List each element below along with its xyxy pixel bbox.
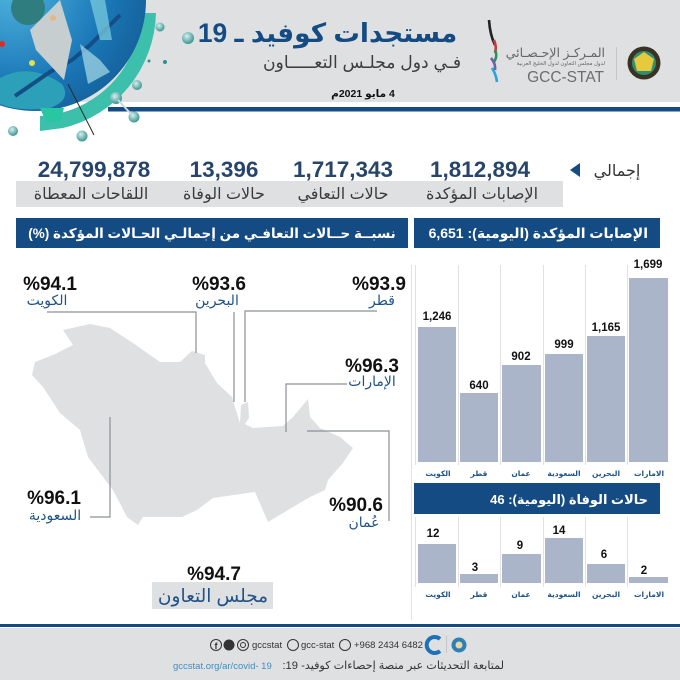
stat: confirmed: 1,812,894 — [430, 157, 531, 182]
bar chart: daily deaths — [415, 517, 668, 599]
stat: deaths: 13,396 — [190, 157, 258, 182]
stat: deaths — [183, 157, 265, 204]
icons: footer logos — [427, 636, 466, 653]
bar chart: daily confirmed: 640 — [469, 380, 489, 392]
callout: Qatar: %93.9 — [352, 274, 406, 295]
icons: social media — [210, 640, 350, 651]
callout: Oman: %90.6 — [329, 495, 383, 516]
stat: recovered — [293, 157, 393, 204]
icon: header illustration with vaccine needle — [0, 0, 194, 142]
stat: deaths: حالات الوفاة — [183, 186, 265, 204]
bar chart: daily confirmed: 1,246 — [423, 311, 451, 323]
bar chart: daily confirmed: الامارات — [634, 469, 664, 478]
bar chart: daily deaths: 6 — [601, 549, 607, 561]
bar chart: daily confirmed: 1,699 — [634, 259, 662, 271]
bar chart: daily confirmed: 999 — [554, 339, 574, 351]
callout: Kuwait: %94.1 — [23, 274, 77, 295]
bar chart: daily deaths: عمان — [511, 590, 531, 599]
footer background — [0, 624, 680, 680]
footer link — [173, 660, 504, 673]
bar chart: daily confirmed: 902 — [511, 351, 531, 363]
bar chart: daily deaths: السعودية — [547, 590, 581, 599]
callout: UAE — [286, 356, 399, 432]
bar chart: daily deaths: 9 — [517, 540, 523, 552]
callout: UAE: %96.3 — [345, 356, 399, 377]
bar chart: daily deaths: الامارات — [634, 590, 664, 599]
bar chart: daily confirmed: 1,165 — [592, 322, 621, 334]
bar chart: daily confirmed: السعودية — [547, 469, 581, 478]
callout: Kuwait — [23, 274, 196, 353]
bar chart: daily confirmed: قطر — [470, 469, 488, 478]
callout: Qatar: قطر — [368, 292, 395, 309]
bar chart: daily deaths: 2 — [641, 565, 647, 577]
bar chart: daily confirmed: الكويت — [425, 469, 451, 478]
contact line — [252, 640, 423, 651]
contact line: +968 2434 6482 — [354, 640, 423, 651]
callout: Bahrain: %93.6 — [192, 274, 246, 295]
icons: social media: f — [214, 641, 218, 651]
header background — [0, 0, 680, 112]
bar chart: daily deaths: قطر — [470, 590, 488, 599]
footer link: gccstat.org/ar/covid- 19 — [173, 661, 272, 672]
callout: Qatar — [245, 274, 406, 402]
bar chart: daily deaths: 3 — [472, 562, 478, 574]
bar chart: daily confirmed: عمان — [511, 469, 531, 478]
bar chart: daily deaths: 12 — [427, 528, 439, 540]
contact line: gcc-stat — [301, 640, 335, 651]
heading: recovery rate — [16, 218, 408, 248]
logo: GCC-STAT: لدول مجلس التعاون لدول الخليج العربية — [517, 61, 605, 67]
stat: confirmed — [426, 157, 538, 204]
contact line: gccstat — [252, 640, 282, 651]
callout: Saudi Arabia — [27, 417, 110, 524]
callout: Kuwait: الكويت — [27, 292, 67, 309]
heading: daily deaths — [414, 483, 660, 514]
footer link: لمتابعة التحديثات عبر منصة إحصاءات كوفيد- 19: — [282, 660, 504, 673]
stat: vaccines: اللقاحات المعطاة — [34, 186, 148, 203]
callout: Bahrain — [192, 274, 246, 402]
bar chart: daily confirmed — [415, 259, 668, 478]
bar chart: daily deaths: 14 — [553, 525, 566, 537]
callout: UAE: الإمارات — [348, 373, 396, 390]
callout: GCC total — [152, 564, 273, 609]
heading: daily confirmed — [414, 218, 660, 248]
stat: recovered: 1,717,343 — [293, 157, 393, 182]
callout: Oman — [307, 431, 389, 530]
title: مستجدات كوفيد ـ 19 — [198, 18, 457, 49]
map of GCC countries — [32, 324, 353, 525]
logo: GCC-STAT — [489, 20, 660, 86]
logo: GCC-STAT: المـركـز الإحـصـائي — [506, 46, 605, 61]
callout: Oman: عُمان — [348, 514, 380, 530]
stats panel — [16, 157, 563, 207]
callout: GCC total: مجلس التعاون — [158, 585, 268, 607]
callout: GCC total: %94.7 — [187, 564, 241, 585]
bar chart: daily deaths: البحرين — [592, 590, 620, 599]
stat: vaccines — [34, 157, 150, 203]
callout: Bahrain: البحرين — [195, 292, 239, 309]
heading: daily deaths: حالات الوفاة (اليومية): 46 — [490, 492, 648, 507]
subtitle: فـي دول مجلـس التعـــــاون — [263, 52, 461, 73]
heading: recovery rate: نسبــة حــالات التعافـي من إجمالـي الحـالات المؤكدة (%) — [28, 226, 396, 241]
stat: recovered: حالات التعافي — [297, 186, 389, 204]
callout: Saudi Arabia: السعودية — [29, 507, 81, 524]
bar chart: daily deaths: الكويت — [425, 590, 451, 599]
total label with arrow — [570, 163, 640, 181]
logo: GCC-STAT: GCC-STAT — [527, 69, 605, 86]
bar chart: daily confirmed: البحرين — [592, 469, 620, 478]
stat: vaccines: 24,799,878 — [38, 157, 150, 182]
callout: Saudi Arabia: %96.1 — [27, 488, 81, 509]
total label with arrow: إجمالي — [594, 163, 640, 181]
date: 4 مايو 2021م — [331, 88, 395, 100]
stat: confirmed: الإصابات المؤكدة — [426, 186, 538, 204]
heading: daily confirmed: الإصابات المؤكدة (اليومية): 6,651 — [429, 225, 648, 242]
